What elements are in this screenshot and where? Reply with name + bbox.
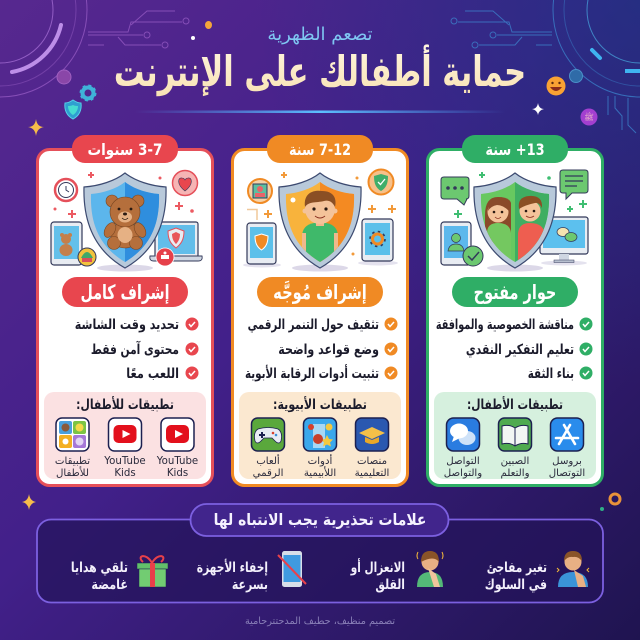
warning: mysterious gifts (71, 556, 168, 592)
app: app store: بروسل (552, 456, 582, 467)
warning: hiding devices: إخفاء الأجهزة (197, 558, 268, 575)
check bubble (463, 246, 483, 266)
warning: behaviour change: في السلوك (485, 576, 547, 592)
app: YouTube Kids second (103, 418, 146, 479)
checklist: تعليم التفكير النقدي (466, 341, 574, 357)
icon: anxious person (417, 551, 443, 587)
right tablet (358, 219, 398, 266)
warning: isolation (350, 551, 443, 592)
tablet (51, 222, 82, 265)
icon: orange dot (205, 21, 212, 29)
sparkles (54, 172, 194, 218)
icon: gear (80, 86, 96, 100)
app: chat: والتواصل (444, 468, 482, 479)
panel: warning signs (37, 504, 603, 602)
app: tools: اللأبيمية (304, 466, 336, 479)
app: chat (444, 418, 482, 479)
monitor (540, 217, 588, 266)
sparkles (454, 172, 587, 218)
warning heading (190, 504, 448, 536)
panel: card ages 3-7 (38, 135, 212, 487)
checklist (436, 316, 592, 381)
age pill (267, 135, 373, 163)
decorative circuit rings left (0, 0, 189, 97)
checklist (245, 316, 398, 381)
checklist: تحديد وقت الشاشة (75, 316, 179, 332)
apps panel (239, 392, 401, 479)
sparkles (264, 172, 396, 256)
icon: white dot (191, 36, 195, 40)
decorative green dot (600, 507, 604, 511)
panel: card ages 7-12 (232, 135, 408, 487)
age pill (72, 135, 178, 163)
warning: behaviour change (485, 551, 589, 592)
app: kids apps grid: تطبيقات (55, 456, 90, 467)
icon: small shield (65, 100, 81, 119)
apps panel (44, 392, 206, 479)
card frame (428, 150, 602, 487)
status pill (452, 277, 578, 307)
checklist: مناقشة الخصوصية والموافقة (436, 316, 574, 334)
status pill: إشراف كامل (81, 282, 169, 305)
app: education: منصات (357, 456, 387, 467)
apps panel: تطبيقات الأطفال: (467, 396, 563, 412)
icon: crossed-out phone (278, 551, 306, 587)
app: games (252, 418, 284, 479)
ring node right (570, 70, 582, 82)
app: chat: التواصل (446, 456, 480, 467)
warning: behaviour change: تغير مفاجئ (487, 558, 547, 575)
app: tools (304, 418, 336, 479)
app: app store: التوتصال (549, 468, 585, 479)
shield with teens (474, 173, 556, 269)
left chat bubble (441, 177, 469, 205)
app badge (78, 248, 96, 266)
main title: حماية أطفالك على الإنترنت (114, 44, 526, 96)
warning: isolation: الانعزال أو (350, 558, 405, 575)
app: kids apps grid: للأطفال (56, 466, 89, 479)
checklist: تثقيف حول التنمر الرقمي (248, 316, 379, 332)
icon: smiley (546, 76, 566, 96)
illustration: teens shield (441, 170, 588, 272)
status pill (257, 277, 383, 307)
app: book: الصبين (501, 456, 529, 467)
card frame (38, 150, 212, 487)
right chat bubble (560, 170, 588, 199)
warning heading: علامات تحذيرية يجب الانتباه لها (214, 510, 426, 529)
icon: gift (137, 556, 168, 587)
app: YouTube Kids second: YouTube (103, 456, 146, 467)
app: games: ألعاب (256, 454, 280, 467)
panel: card ages 13+ (428, 135, 602, 487)
bracket (247, 210, 257, 220)
decorative circuit rings right (451, 0, 640, 133)
shield with child (279, 173, 361, 268)
age pill: 13+ سنة (485, 141, 545, 159)
left tablet (243, 223, 281, 268)
age pill: 7-12 سنة (289, 142, 351, 159)
app: tools: أدوات (308, 454, 333, 467)
app: YouTube Kids second: Kids (114, 468, 136, 479)
checklist: وضع قواعد واضحة (278, 341, 379, 357)
portrait icon (248, 179, 272, 203)
footer note: تصميم منظيف، حطيف المدحتترحامية (245, 616, 395, 627)
icon: white sparkle (532, 103, 544, 115)
illustration: child shield (243, 170, 398, 272)
app: games: الرقمي (253, 468, 283, 479)
clock icon (55, 179, 77, 201)
app: book (498, 418, 532, 479)
app: YouTube Kids (156, 418, 198, 479)
warning: mysterious gifts: تلقي هدايا (71, 559, 128, 575)
warning: hiding devices: بسرعة (232, 576, 268, 592)
checklist: اللعب معًا (126, 366, 179, 382)
apps panel (434, 392, 596, 479)
icon: worried man (557, 551, 589, 587)
checklist (75, 316, 198, 382)
warning: hiding devices (197, 551, 306, 592)
status pill: إشراف مُوجَّه (273, 279, 367, 305)
decorative ring bottom right (610, 494, 620, 504)
tablet with person (441, 222, 471, 265)
app: kids apps grid (55, 418, 90, 479)
checklist: بناء الثقة (528, 365, 574, 381)
app: YouTube Kids: Kids (167, 468, 188, 479)
icon: gold star (28, 119, 44, 136)
laptop (150, 222, 202, 261)
app: YouTube Kids: YouTube (156, 456, 198, 467)
age pill: 3-7 سنوات (88, 141, 162, 159)
app: app store (549, 418, 585, 479)
status pill (62, 277, 188, 307)
checklist: تثبيت أدوات الرقابة الأبوية (245, 364, 379, 381)
shield badge (368, 170, 394, 194)
icon: purple badge (580, 108, 598, 126)
checklist: محتوى آمن فقط (91, 340, 179, 357)
warning: mysterious gifts: غامضة (91, 576, 128, 592)
illustration: teddy shield (51, 170, 202, 272)
age pill (462, 135, 568, 163)
app: education (355, 418, 389, 479)
app: book: والتعلم (500, 468, 530, 479)
subtitle: تصعم الظهرية (267, 24, 373, 45)
apps panel: تطبيقات للأطفال: (76, 396, 174, 412)
decorative star bottom left (22, 494, 36, 510)
app: education: التعليمية (355, 468, 389, 479)
warning: isolation: القلق (375, 576, 405, 592)
heart icon (172, 170, 198, 196)
shield with teddy bear (84, 173, 166, 268)
card frame (232, 150, 408, 487)
apps panel: تطبيقات الأبيوية: (273, 396, 367, 412)
status pill: حوار مفتوح (474, 282, 556, 305)
title divider (135, 110, 505, 113)
ring node left (57, 70, 71, 84)
icon: purple badge: ﷺ (584, 111, 594, 122)
red badge (156, 248, 174, 266)
